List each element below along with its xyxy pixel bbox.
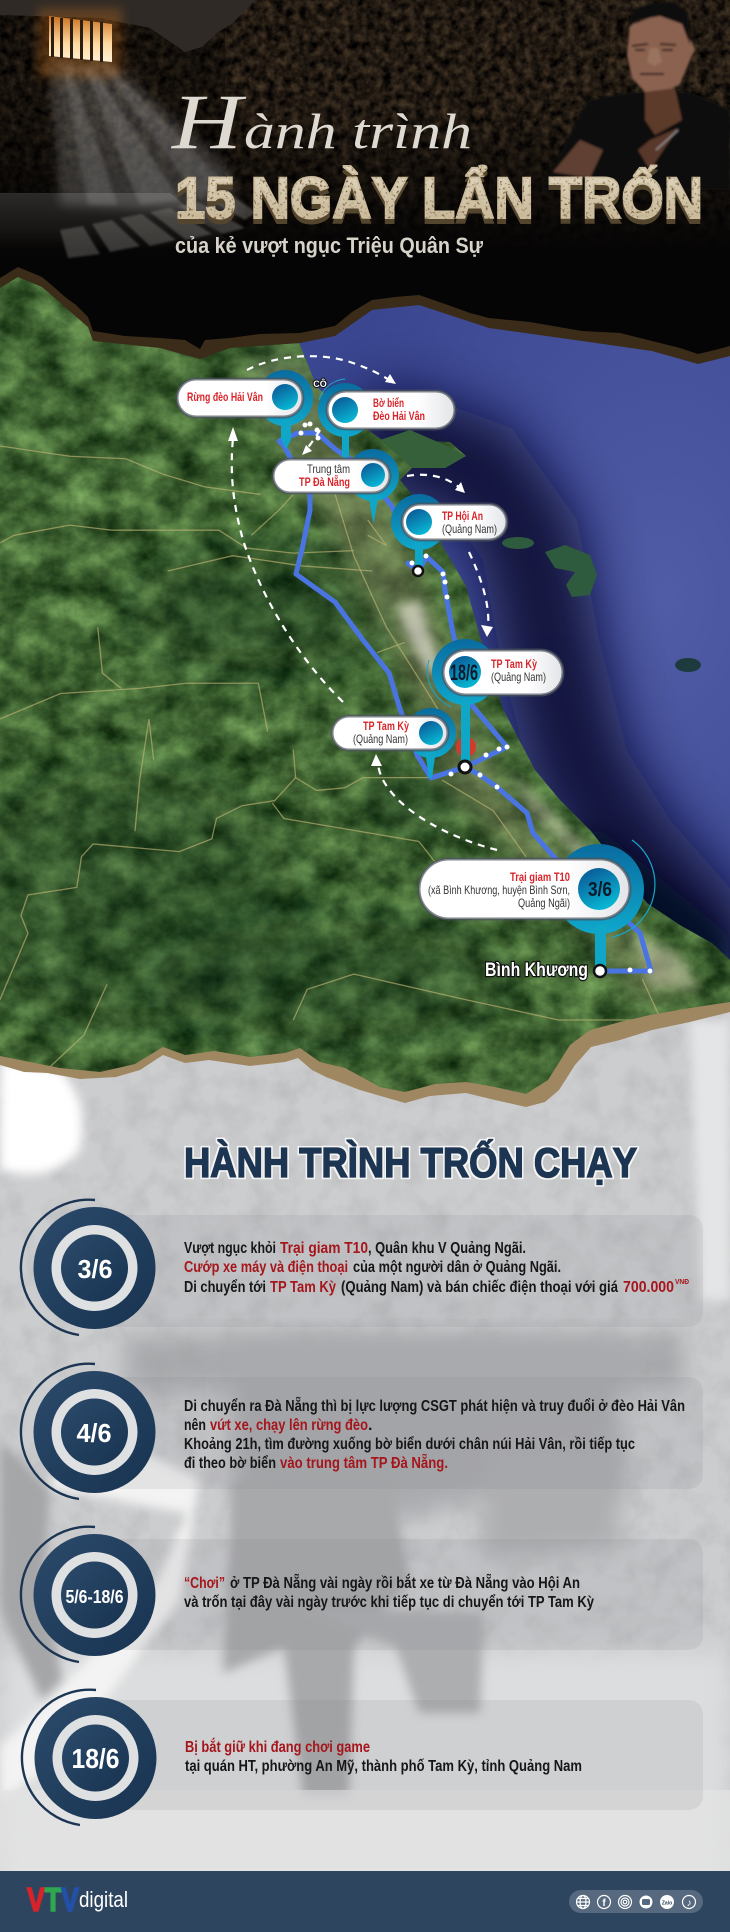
event text 5/6-18/6 [184, 1572, 594, 1611]
event text 5/6-18/6: “Chơi” [184, 1575, 225, 1592]
place label: Bình Khương: Bình Khương [485, 960, 588, 981]
pin: TP Hội An [391, 494, 507, 576]
event text 4/6: vứt xe, chạy lên rừng đèo [210, 1417, 368, 1434]
event text 3/6: Trại giam T10 [280, 1240, 368, 1257]
event text 4/6: . [368, 1417, 372, 1434]
pin: Trung tâm TP Đà Nẵng [273, 449, 399, 522]
map panel [0, 260, 730, 1120]
date badge 18/6 [22, 1690, 156, 1825]
pin: Trại giam T10, 3/6: Trại giam T10 [510, 870, 570, 884]
land satellite base [0, 260, 730, 1120]
event text 3/6: Cướp xe máy và điện thoại [184, 1259, 348, 1276]
header panel [0, 0, 730, 360]
pin: TP Tam Kỳ, 18/6: TP Tam Kỳ [491, 657, 537, 671]
event text 4/6 [184, 1395, 685, 1472]
cell ceiling [0, 0, 255, 52]
wall texture [0, 0, 730, 250]
event row: 3/6 [21, 1200, 703, 1335]
pin: TP Hội An: (Quảng Nam) [442, 522, 497, 536]
pin: Rừng đèo Hải Vân: Rừng đèo Hải Vân [187, 390, 263, 404]
event text 3/6: VNĐ [675, 1279, 689, 1286]
icon: youtube [640, 1896, 652, 1908]
floor bar shadows [60, 196, 256, 258]
pin: Trung tâm TP Đà Nẵng: TP Đà Nẵng [299, 474, 350, 489]
logo: VTV digital: VTV [27, 1881, 79, 1918]
lower section background photo [0, 1000, 730, 1932]
pin: TP Tam Kỳ, left: (Quảng Nam) [353, 732, 408, 746]
date badge 3/6: 3/6 [78, 1254, 112, 1284]
portrait: fugitive [540, 2, 730, 190]
event text 18/6: Bị bắt giữ khi đang chơi game [185, 1737, 370, 1756]
date badge 3/6 [21, 1200, 155, 1335]
event text 4/6: nên [184, 1417, 206, 1434]
event text 4/6: Khoảng 21h, tìm đường xuống bờ biển dưới chân núi Hải Vân, rồi tiếp tục [184, 1435, 635, 1453]
icon: zalo: Zalo [662, 1900, 672, 1906]
event row: 5/6-18/6 [21, 1527, 703, 1662]
pin: Trung tâm TP Đà Nẵng: Trung tâm [307, 462, 350, 476]
prison window [38, 8, 122, 78]
event text 3/6: của một người dân ở Quảng Ngãi. [353, 1259, 561, 1276]
icon: facebook: f [602, 1898, 606, 1909]
sea [298, 300, 730, 960]
event text 4/6: đi theo bờ biển [184, 1454, 276, 1472]
icon: website [576, 1896, 590, 1908]
title main line: 15 NGÀY LẨN TRỐN [175, 166, 703, 231]
title script line: ành trình [244, 103, 472, 159]
red marker spot [456, 737, 476, 757]
event text 3/6: (Quảng Nam) và bán chiếc điện thoại với giá [341, 1279, 618, 1296]
event text 18/6 [185, 1737, 582, 1775]
footer bar [0, 1871, 730, 1932]
route dots [298, 422, 652, 974]
event text 3/6: 700.000 [623, 1279, 674, 1296]
pin: Bờ biển Đèo Hải Vân: Bờ biển [373, 396, 404, 410]
logo: VTV digital: digital [79, 1887, 128, 1912]
pin: Trại giam T10, 3/6 [419, 840, 655, 977]
event text 5/6-18/6: ở TP Đà Nẵng vài ngày rồi bắt xe từ Đà Nẵng vào Hội An [230, 1572, 580, 1592]
prison light beams [49, 60, 240, 215]
event text 3/6: TP Tam Kỳ [270, 1279, 336, 1296]
event text 3/6: , Quân khu V Quảng Ngãi. [368, 1240, 526, 1257]
event row: 4/6 [21, 1364, 703, 1499]
event text 3/6 [184, 1240, 689, 1296]
event row: 18/6 [22, 1690, 703, 1825]
logo: VTV digital [27, 1881, 128, 1918]
icon: instagram [618, 1896, 632, 1908]
social icons [569, 1890, 703, 1913]
event text 5/6-18/6: và trốn tại đây vài ngày trước khi tiếp tục di chuyển tới TP Tam Kỳ [184, 1593, 594, 1611]
pin: Rừng đèo Hải Vân [177, 370, 313, 449]
pin: TP Tam Kỳ, 18/6: (Quảng Nam) [491, 670, 546, 684]
pin: TP Tam Kỳ, left: TP Tam Kỳ [363, 719, 409, 733]
event text 3/6: Di chuyển tới [184, 1278, 266, 1296]
islands [380, 430, 701, 672]
date badge 4/6 [21, 1364, 155, 1499]
date badge 5/6-18/6: 5/6-18/6 [66, 1587, 124, 1607]
pin: TP Tam Kỳ, 18/6: 18/6 [450, 660, 478, 685]
floor [0, 193, 240, 250]
date badge 18/6: 18/6 [72, 1743, 120, 1774]
pin: TP Hội An: TP Hội An [442, 509, 483, 523]
icon: tiktok: ♪ [686, 1898, 692, 1909]
event text 3/6: Vượt ngục khỏi [184, 1240, 276, 1257]
pin: Trại giam T10, 3/6: 3/6 [588, 879, 612, 901]
pin: TP Tam Kỳ, 18/6 [427, 639, 563, 773]
land dark and light tones [0, 360, 700, 1040]
date badge 4/6: 4/6 [76, 1418, 112, 1448]
pin: TP Tam Kỳ, left [332, 708, 456, 778]
torn edge: header brown band [0, 250, 730, 364]
route line [279, 433, 651, 971]
pin: Bờ biển Đèo Hải Vân: Đèo Hải Vân [373, 409, 425, 423]
coastal dark shading [400, 440, 700, 950]
subtitle: của kẻ vượt ngục Triệu Quân Sự [175, 233, 483, 258]
place label: Cô: CÔ [313, 378, 327, 389]
pin: Trại giam T10, 3/6: (xã Bình Khương, huyện Bình Sơn, [428, 883, 570, 897]
pin: Trại giam T10, 3/6: Quảng Ngãi) [518, 896, 570, 910]
event text 4/6: vào trung tâm TP Đà Nẵng. [280, 1452, 448, 1472]
pin: Bờ biển Đèo Hải Vân [318, 379, 455, 459]
torn edge: paper band above lower section [0, 1002, 730, 1932]
title script line: H [171, 78, 247, 165]
dashed direction arrows [228, 356, 497, 850]
date badge 5/6-18/6 [21, 1527, 155, 1662]
roads [0, 445, 659, 1066]
section heading: HÀNH TRÌNH TRỐN CHẠY [184, 1138, 637, 1186]
event text 18/6: tại quán HT, phường An Mỹ, thành phố Tam Kỳ, tỉnh Quảng Nam [185, 1758, 582, 1775]
